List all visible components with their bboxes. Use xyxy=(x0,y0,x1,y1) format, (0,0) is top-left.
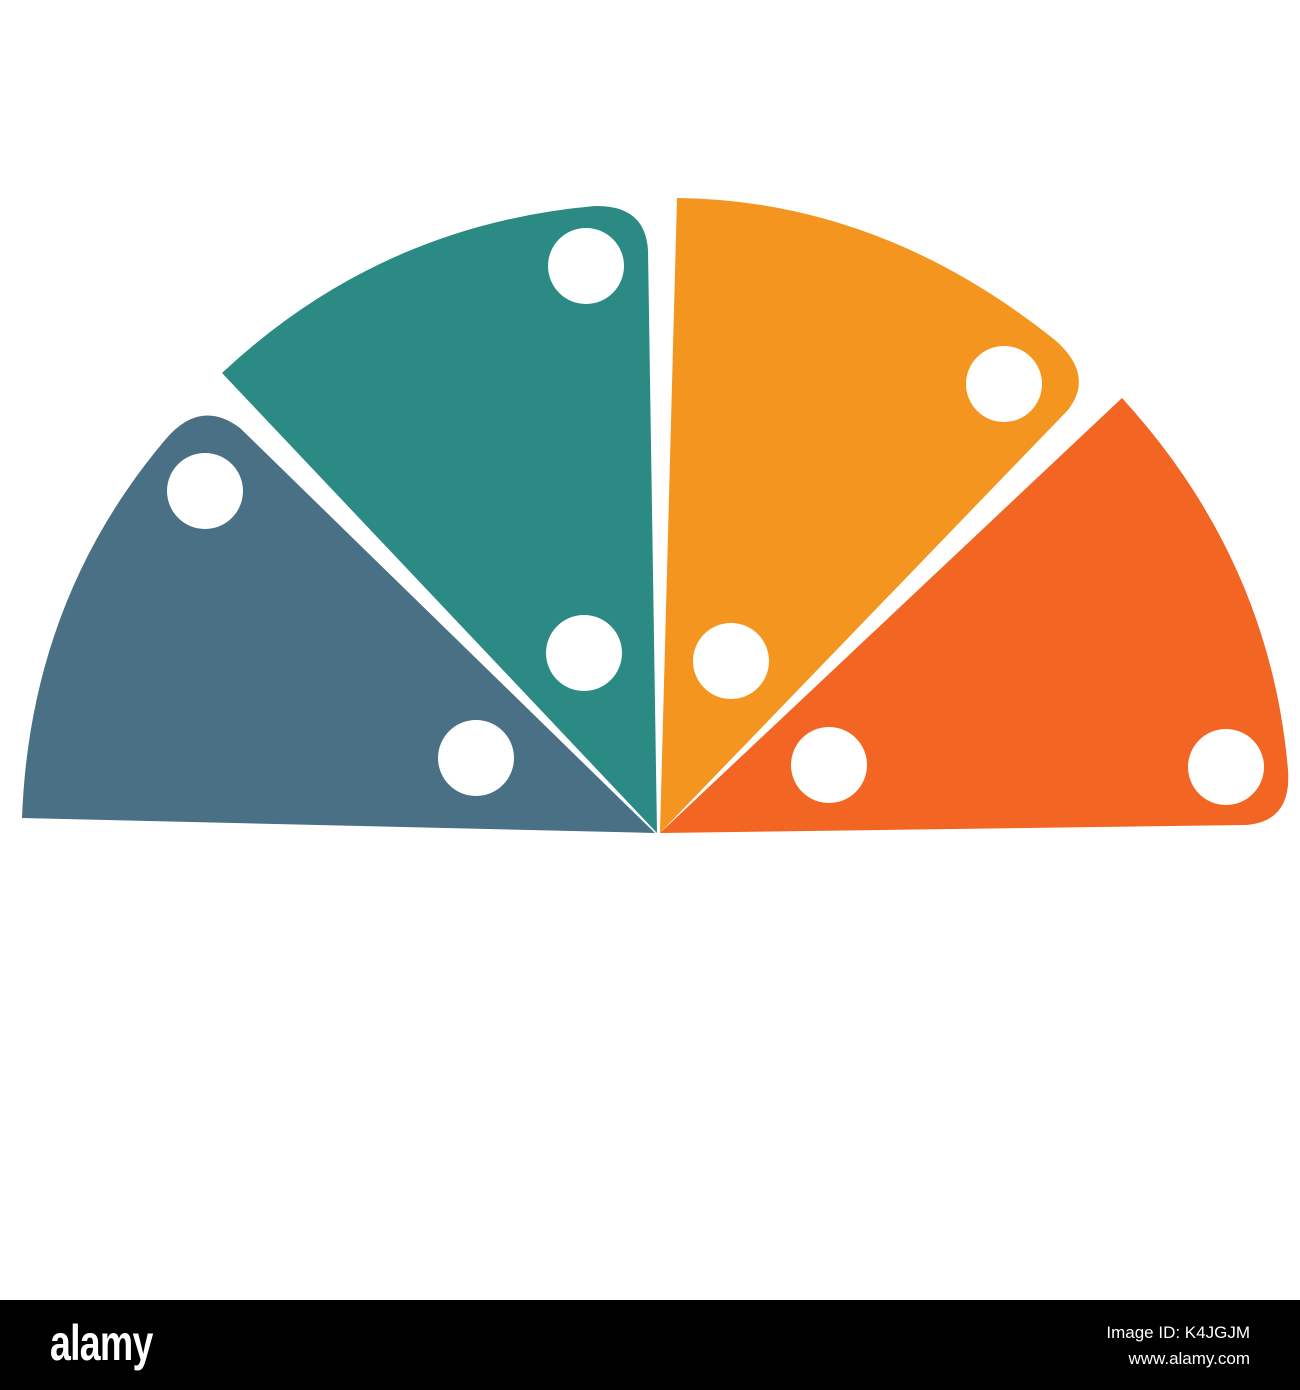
circles on blue-grey wedge xyxy=(167,453,514,796)
circles on orange wedge xyxy=(693,346,1042,699)
footer image id xyxy=(1106,1323,1250,1368)
footer bar xyxy=(0,1300,1300,1390)
wedge: orange xyxy=(660,198,1079,833)
wedge: blue-grey xyxy=(22,416,655,833)
circles on teal wedge xyxy=(546,228,624,691)
footer logo: alamy xyxy=(50,1315,153,1371)
wedge: teal xyxy=(222,206,657,833)
wedge: red-orange xyxy=(660,398,1288,833)
footer image id: www.alamy.com xyxy=(1128,1349,1250,1368)
circles on red-orange wedge xyxy=(791,727,1264,805)
footer image id: Image ID: K4JGJM xyxy=(1106,1323,1250,1342)
